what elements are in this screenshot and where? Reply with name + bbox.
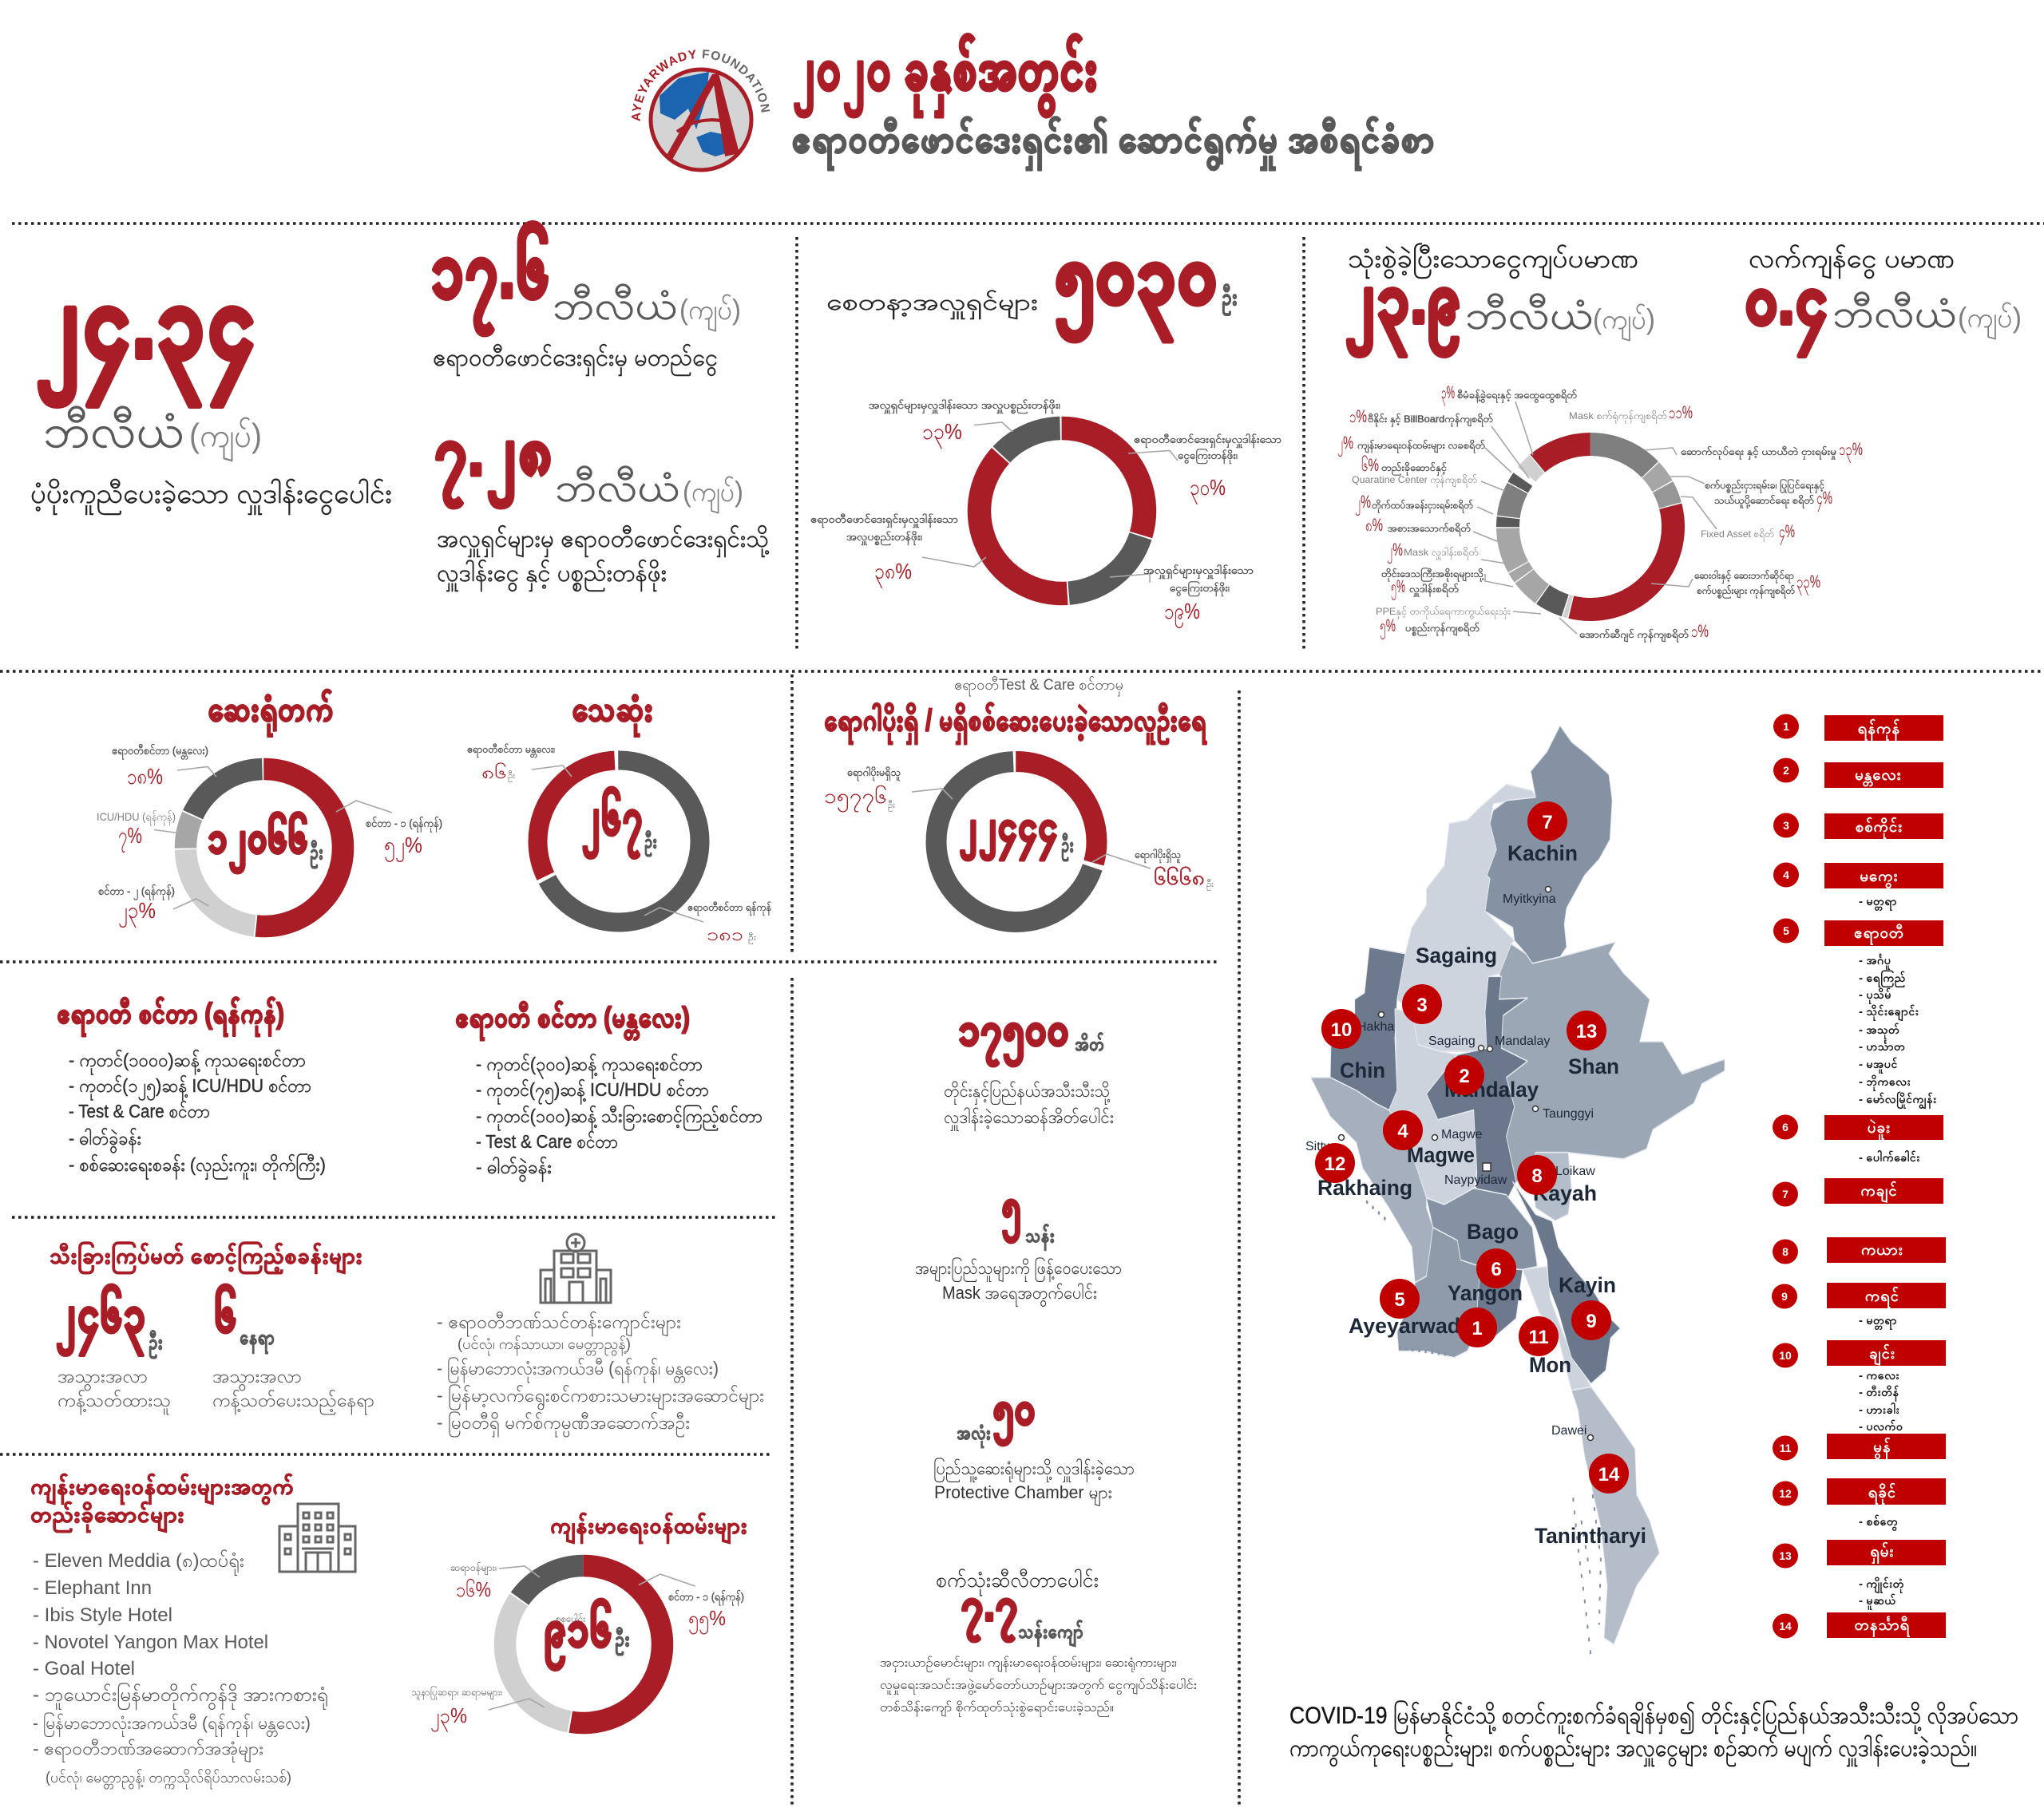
- donut chart: deaths: ဦး: [644, 830, 657, 857]
- heading: generous donors: စေတနာ့အလှူရှင်များ: [826, 288, 1038, 320]
- donut chart: admissions: စင်တာ - ၂ (ရန်ကုန်): [98, 884, 175, 900]
- legend: regions and townships: မန္တလေး: [1855, 766, 1901, 787]
- donut chart: expenditure breakdown: တည်းခိုဆောင်နှင့်: [1381, 461, 1447, 476]
- heading: health workers: ကျန်းမာရေးဝန်ထမ်းများ: [550, 1513, 747, 1545]
- title: ၂၀၂၀ ခုနှစ်အတွင်း: [791, 34, 1098, 117]
- list: quarantine sites: - မြန်မာဘောလုံးအကယ်ဒမီ (ရန်ကုန်၊ မန္တလေး): [437, 1358, 719, 1383]
- donut chart: deaths: ၁၈၁: [707, 924, 743, 944]
- donut chart: test results: ရောဂါပိုးရှိသူ: [1135, 849, 1181, 863]
- donut chart: test results: ၁၅၇၇၆: [824, 783, 887, 813]
- donut chart: expenditure breakdown: ပစ္စည်းကုန်ကျစရိတ်: [1405, 622, 1480, 636]
- legend: regions and townships: - တီးတိန်: [1859, 1385, 1899, 1402]
- legend: regions and townships: - မော်လမြိုင်ကျွန်း: [1859, 1090, 1937, 1110]
- legend: regions and townships: ချင်း: [1868, 1345, 1895, 1366]
- map: Myanmar regions: Hakha: [1357, 1020, 1394, 1034]
- donut chart: donation sources: ဧရာဝတီဖောင်ဒေးရှင်းမှလှူဒါန်းသော: [1134, 433, 1281, 448]
- map number badges: 11: [1528, 1327, 1549, 1348]
- heading: amount spent: သုံးစွဲခဲ့ပြီးသောငွေကျပ်ပမာဏ: [1348, 244, 1638, 279]
- unit: billion kyat: ဘီလီယံ: [1832, 291, 1956, 336]
- donut chart: admissions: ၁၈%: [127, 764, 163, 789]
- donut chart: expenditure breakdown: စက်ပစ္စည်းငှားရမ်းခ၊ ပြုပြင်ရေးနှင့်: [1705, 478, 1824, 493]
- legend: regions and townships: 6: [1782, 1121, 1788, 1133]
- map: Myanmar regions: Yangon: [1448, 1281, 1523, 1305]
- map: Myanmar regions: [1305, 726, 1725, 1657]
- donut chart: expenditure breakdown: Quaratine Center ကုန်ကျစရိတ်: [1352, 473, 1477, 488]
- legend: regions and townships: - အင်္ဂပူ: [1859, 953, 1891, 970]
- legend: regions and townships: - ဟင်္သာတ: [1859, 1039, 1905, 1054]
- stat: fuel litres: ၇.၇: [961, 1579, 1018, 1641]
- map: Myanmar regions: Mandalay: [1444, 1078, 1539, 1102]
- legend: regions and townships: စစ်ကိုင်း: [1855, 818, 1903, 839]
- icon: hospital: [541, 1234, 611, 1303]
- legend: regions and townships: 5: [1783, 924, 1789, 937]
- legend: regions and townships: 4: [1783, 868, 1789, 881]
- stat: fuel litres: [880, 1568, 1197, 1717]
- map: Myanmar regions: Ayeyarwady: [1349, 1314, 1472, 1338]
- header: logo and title: [632, 33, 1435, 172]
- donut chart: expenditure breakdown: တိုက်ထပ်အခန်းငှားရမ်းစရိတ်: [1372, 499, 1473, 513]
- stat: rice bags: [944, 1003, 1114, 1131]
- legend: regions and townships: - ပုသိမ်: [1859, 987, 1891, 1004]
- panel: Ayeyarwady centre Yangon: [57, 997, 326, 1180]
- stat: quarantine sites: ကန့်သတ်ပေးသည့်နေရာ: [212, 1390, 374, 1414]
- map: Myanmar regions: Kayah: [1533, 1181, 1597, 1205]
- map: Myanmar regions: Dawei: [1551, 1424, 1586, 1438]
- list: facilities: - Test & Care စင်တာ: [69, 1101, 210, 1122]
- heading: ဧရာဝတီ စင်တာ (မန္တလေး): [455, 1001, 690, 1040]
- legend: regions and townships: 7: [1782, 1188, 1788, 1201]
- donut chart: test results: [824, 762, 1214, 922]
- legend: regions and townships: မွန်: [1873, 1438, 1891, 1459]
- list: accommodation sites: - Eleven Meddia (၈)ထပ်ရုံး: [33, 1549, 244, 1576]
- caption: foundation contribution: ဧရာဝတီဖောင်ဒေးရှင်းမှ မတည်ငွေ: [433, 344, 718, 377]
- panel: total donations: (ကျပ်): [679, 293, 741, 332]
- stat: fuel litres: စက်သုံးဆီလီတာပေါင်း: [936, 1568, 1099, 1596]
- legend: regions and townships: - မအူပင်: [1859, 1057, 1898, 1074]
- donut chart: test results: ဦး: [1061, 833, 1074, 861]
- list: facilities: - ဓါတ်ခွဲခန်း: [69, 1128, 141, 1153]
- stat: quarantined people: ၂၄၆၃: [54, 1284, 146, 1355]
- donut chart: test results: ၆၆၆၈: [1154, 864, 1205, 889]
- donut chart: expenditure breakdown: ၃%: [1441, 382, 1455, 406]
- legend: regions and townships: 8: [1782, 1245, 1788, 1258]
- legend: regions and townships: 13: [1779, 1549, 1792, 1562]
- list: facilities: - ကုတင်(၃၀၀)ဆန့် ကုသရေးစင်တာ: [476, 1054, 703, 1078]
- caption: total donations: ပံ့ပိုးကူညီပေးခဲ့သော လှူဒါန်းငွေပေါင်း: [30, 479, 392, 515]
- donut chart: donation sources: ငွေကြေးတန်ဖိုး၊: [1170, 581, 1230, 596]
- stat: foundation contribution: ၁၇.၆: [430, 222, 550, 335]
- panel: donated supplies: [880, 1003, 1197, 1717]
- donut chart: expenditure breakdown: ၁၁%: [1669, 402, 1693, 422]
- donut chart: deaths: ဦး: [508, 770, 515, 782]
- stat: balance 0.4: ၀.၄: [1745, 259, 1828, 356]
- donut chart: donation sources: [810, 399, 1281, 629]
- list: quarantine sites: (ပင်လုံ၊ ကန်သာယာ၊ မေတ္တာညွန့်): [458, 1335, 631, 1356]
- legend: regions and townships: 10: [1779, 1349, 1792, 1362]
- list: accommodation sites: - ဘူယောင်းမြန်မာတိုက်ကွန်ဒို အားကစားရုံ: [33, 1682, 328, 1711]
- panel: Ayeyarwady centre Mandalay: [455, 1001, 763, 1182]
- donut chart: deaths: ဦး: [748, 932, 756, 944]
- legend: regions and townships: - သိုင်းချောင်း: [1859, 1004, 1919, 1021]
- map: Myanmar regions: Kayin: [1559, 1273, 1616, 1297]
- donut chart: donation sources: ငွေကြေးတန်ဖိုး၊: [1178, 449, 1238, 464]
- heading: deaths: သေဆုံး: [572, 690, 653, 737]
- legend: regions and townships: - ကလေး: [1859, 1369, 1899, 1383]
- map: Myanmar regions: Sagaing: [1416, 944, 1497, 967]
- list: accommodation sites: - ဧရာဝတီဘဏ်အဆောက်အအုံများ: [33, 1739, 263, 1763]
- stat: quarantined people: အသွားအလာ: [57, 1366, 148, 1391]
- stat: donor contribution: ၇.၂၈: [434, 411, 553, 508]
- donut chart: deaths: ၂၆၇: [580, 786, 643, 858]
- map: Myanmar regions: Sittwe: [1305, 1140, 1341, 1153]
- map number badges: 6: [1491, 1259, 1502, 1280]
- map: Myanmar regions: Naypyidaw: [1444, 1173, 1507, 1187]
- donut chart: health workers: ဦး: [615, 1627, 630, 1656]
- stat: rice bags: လှူဒါန်းခဲ့သောဆန်အိတ်ပေါင်း: [944, 1107, 1114, 1131]
- map number badges: 10: [1331, 1019, 1352, 1041]
- list: facilities: - ကုတင်(၁၀၀)ဆန့် သီးခြားစောင့်ကြည့်စင်တာ: [476, 1106, 763, 1130]
- list: facilities: - ဓါတ်ခွဲခန်း: [476, 1157, 552, 1182]
- donut chart: expenditure breakdown: ၅%: [1380, 615, 1396, 639]
- heading: remaining balance: လက်ကျန်ငွေ ပမာဏ: [1749, 244, 1955, 279]
- map number badges: 2: [1459, 1066, 1470, 1087]
- map number badges: [1315, 801, 1629, 1493]
- map: Myanmar regions: Chin: [1340, 1058, 1385, 1082]
- donut chart: expenditure breakdown: ၃၃%: [1796, 572, 1820, 595]
- list: facilities: - ကုတင်(၁၀၀၀)ဆန့် ကုသရေးစင်တာ: [69, 1050, 306, 1074]
- stat: quarantined people: ဦး: [149, 1330, 163, 1359]
- unit: billion kyat: ဘီလီယံ: [43, 406, 184, 457]
- legend: regions and townships: - မတ္တရာ: [1859, 1314, 1897, 1330]
- map: Myanmar regions: Mon: [1529, 1353, 1571, 1377]
- donut chart: expenditure breakdown: စက်ပစ္စည်းများ ကုန်ကျစရိတ်: [1697, 584, 1795, 599]
- donut chart: expenditure breakdown: ဗီနိုင်း နှင့် BillBoardကုန်ကျစရိတ်: [1368, 413, 1493, 427]
- map: Myanmar regions: Tanintharyi: [1535, 1524, 1646, 1548]
- list: accommodation sites: [33, 1549, 328, 1790]
- list: facilities: - စစ်ဆေးရေးစခန်း (လှည်းကူး၊ တိုက်ကြီး): [69, 1154, 326, 1180]
- list: quarantine sites: [437, 1311, 764, 1438]
- list: accommodation sites: - မြန်မာဘောလုံးအကယ်ဒမီ (ရန်ကုန်၊ မန္တလေး): [33, 1712, 311, 1737]
- stat: protective chambers: ၅၀: [992, 1383, 1036, 1445]
- icon: Ayeyarwady Foundation logo: AYEYARWADY FOUNDATION: [632, 49, 770, 121]
- donut chart: admissions: ၂၃%: [118, 898, 156, 928]
- stat: quarantined people: [54, 1284, 171, 1414]
- unit: billion kyat: ဘီလီယံ: [1465, 292, 1593, 338]
- donut chart: donation sources: ၁၃%: [922, 419, 962, 449]
- donut chart: expenditure breakdown: စီမံခန့်ခွဲရေးနှင့် အထွေထွေစရိတ်: [1457, 389, 1577, 403]
- panel: tests: [824, 675, 1214, 922]
- legend: regions and townships: - ပလက်ဝ: [1859, 1419, 1903, 1434]
- map: Myanmar regions: Myitkyina: [1503, 892, 1556, 906]
- list: accommodation sites: (ပင်လုံ၊ မေတ္တာညွန့်၊ တက္ကသိုလ်ရိပ်သာလမ်းသစ်): [46, 1768, 291, 1790]
- list: facilities: - ကုတင်(၇၅)ဆန့် ICU/HDU စင်တာ: [476, 1079, 709, 1104]
- legend: regions and townships: ကချင်: [1860, 1182, 1897, 1203]
- subheading: Test and Care centre: ဧရာဝတီTest & Care စင်တာမှ: [954, 675, 1123, 697]
- donut chart: expenditure breakdown: ၁၃%: [1839, 439, 1863, 463]
- legend: regions and townships: ဧရာဝတီ: [1853, 924, 1904, 945]
- list: accommodation sites: - Novotel Yangon Max Hotel: [33, 1632, 268, 1653]
- donut chart: expenditure breakdown: [1337, 382, 1863, 643]
- heading: admitted: ဆေးရုံတက်: [208, 689, 334, 737]
- stat: 5030 donors: ၅၀၃၀: [1054, 227, 1218, 341]
- donut chart: expenditure breakdown: ၁%: [1349, 406, 1367, 426]
- donut chart: admissions: [97, 744, 442, 928]
- donut chart: expenditure breakdown: Fixed Asset စရိတ်: [1701, 528, 1774, 542]
- panel: quarantine centres: [50, 1234, 764, 1438]
- heading: ကျန်းမာရေးဝန်ထမ်းများအတွက်: [30, 1474, 294, 1505]
- list: quarantine sites: - မြဝတီရှိ မက်စ်ကုမ္ပဏီအဆောက်အဦး: [437, 1412, 690, 1438]
- stat: masks: Mask အရေအတွက်ပေါင်း: [942, 1283, 1097, 1308]
- caption: donor contribution: [437, 525, 770, 592]
- legend: regions and townships: - ရေကြည်: [1859, 969, 1906, 987]
- donut chart: admissions: ၇%: [118, 823, 142, 853]
- donut chart: health workers: [411, 1561, 744, 1732]
- panel: total donations: (ကျပ်): [189, 417, 262, 462]
- legend: regions and townships: - စစ်တွေ: [1859, 1514, 1898, 1532]
- caption: donor contribution: လှူဒါန်းငွေ နှင့် ပစ္စည်းတန်ဖိုး: [437, 559, 667, 592]
- map number badges: 12: [1325, 1153, 1345, 1175]
- map: Myanmar regions: Taunggyi: [1543, 1107, 1594, 1121]
- heading: tested population: ရောဂါပိုးရှိ / မရှိစစ်ဆေးပေးခဲ့သောလူဦးရေ: [824, 702, 1207, 744]
- stat: rice bags: အိတ်: [1075, 1033, 1104, 1055]
- panel: donors: [810, 227, 1281, 629]
- panel: hospital admissions: [97, 689, 442, 928]
- legend: regions and townships: 1: [1783, 720, 1789, 733]
- panel: health worker accommodation: [30, 1474, 747, 1790]
- donut chart: expenditure breakdown: ၄%: [1779, 521, 1795, 545]
- icon: Ayeyarwady Foundation logo: [632, 49, 770, 172]
- list: facilities: - Test & Care စင်တာ: [476, 1131, 618, 1152]
- donut chart: expenditure breakdown: ကျန်းမာရေးဝန်ထမ်းများ လခစရိတ်: [1357, 439, 1485, 453]
- list: quarantine sites: - ဧရာဝတီဘဏ်သင်တန်းကျောင်းများ: [437, 1311, 681, 1336]
- map: Myanmar regions: Mandalay: [1495, 1035, 1550, 1048]
- stat: protective chambers: ပြည်သူ့ဆေးရုံများသို့ လှူဒါန်းခဲ့သော: [933, 1458, 1135, 1482]
- heading: [30, 1474, 294, 1533]
- stat: masks: ၅: [1001, 1180, 1021, 1242]
- list: facilities: - ကုတင်(၁၂၅)ဆန့် ICU/HDU စင်တာ: [69, 1075, 311, 1100]
- stat: fuel litres: လူမှုရေးအသင်းအဖွဲ့မော်တော်ယာဉ်များအတွက် ငွေကျပ်သိန်းပေါင်း: [880, 1678, 1197, 1695]
- list: accommodation sites: - Elephant Inn: [33, 1577, 152, 1599]
- stat: quarantine sites: အသွားအလာ: [212, 1366, 302, 1391]
- stat: quarantine sites: နေရာ: [240, 1325, 275, 1354]
- donut chart: expenditure breakdown: ၆%: [1361, 455, 1379, 475]
- map number badges: 13: [1576, 1021, 1597, 1042]
- map number badges: 8: [1531, 1165, 1543, 1187]
- legend: regions and townships: မကွေး: [1860, 868, 1898, 888]
- unit: persons: ဦး: [1222, 283, 1238, 316]
- stat: spent 23.9: ၂၃.၉: [1343, 257, 1461, 356]
- panel: expenditure and balance: (ကျပ်): [1593, 303, 1655, 342]
- donut chart: health workers: ၁၆%: [456, 1577, 491, 1601]
- stat: protective chambers: Protective Chamber များ: [934, 1482, 1112, 1506]
- donut chart: expenditure breakdown: အစားအသောက်စရိတ်: [1388, 522, 1471, 536]
- donut chart: expenditure breakdown: ၄%: [1816, 488, 1832, 512]
- donut chart: admissions: ဦး: [310, 840, 323, 868]
- donut chart: expenditure breakdown: တိုင်းဒေသကြီးအစိုးရများသို့: [1381, 567, 1484, 582]
- map number badges: 4: [1397, 1121, 1408, 1142]
- donut chart: health workers: ၉၁၆: [544, 1598, 612, 1670]
- map: Myanmar regions: Sagaing: [1428, 1035, 1476, 1048]
- unit: billion kyat: ဘီလီယံ: [555, 465, 679, 510]
- legend: regions and townships: 3: [1783, 819, 1789, 832]
- list: facilities: [69, 1050, 326, 1180]
- legend: regions and townships: - မူဆယ်: [1859, 1593, 1896, 1610]
- donut chart: health workers: စင်တာ - ၁ (ရန်ကုန်): [668, 1590, 744, 1605]
- legend: regions and townships: - ဟားခါး: [1859, 1402, 1899, 1417]
- stat: fuel litres: တစ်သိန်းကျော် စိုက်ထုတ်သုံးစွဲရောင်းပေးခဲ့သည်။: [880, 1700, 1114, 1717]
- donut chart: expenditure breakdown: ၈%: [1365, 515, 1383, 535]
- donut chart: admissions: ဧရာဝတီစင်တာ (မန္တလေး): [112, 744, 208, 759]
- donut chart: donation sources: ဧရာဝတီဖောင်ဒေးရှင်းမှလှူဒါန်းသော: [810, 513, 958, 528]
- heading: သီးခြားကြပ်မတ် စောင့်ကြည့်စခန်းများ: [50, 1242, 362, 1275]
- map: Myanmar regions: Bago: [1467, 1220, 1519, 1244]
- donut chart: admissions: စင်တာ - ၁ (ရန်ကုန်): [366, 817, 442, 832]
- donut chart: deaths: ဧရာဝတီစင်တာ မန္တလေး၊: [467, 743, 555, 758]
- panel: expenditure and balance: [1337, 244, 2022, 643]
- panel: total donations: [30, 222, 770, 592]
- legend: regions and townships: - မတ္တရာ: [1859, 895, 1897, 911]
- legend: regions and townships: တနင်္သာရီ: [1854, 1616, 1910, 1637]
- donut chart: test results: ဦး: [888, 800, 895, 812]
- legend: regions and townships: 9: [1781, 1290, 1788, 1303]
- unit: billion kyat: ဘီလီယံ: [553, 283, 677, 328]
- donut chart: admissions: ICU/HDU (ရန်ကုန်): [97, 810, 176, 825]
- stat: masks: အများပြည်သူများကို ဖြန့်ဝေပေးသော: [915, 1257, 1122, 1282]
- map: Myanmar regions: Rakhaing: [1317, 1176, 1412, 1200]
- stat: rice bags: ၁၇၅၀၀: [958, 1003, 1069, 1066]
- stat: fuel litres: သန်းကျော်: [1018, 1620, 1083, 1647]
- legend: regions and townships: ကယား: [1861, 1241, 1903, 1259]
- map: Myanmar regions: Kachin: [1507, 841, 1578, 865]
- donut chart: donation sources: ၃၀%: [1190, 475, 1226, 505]
- icon: hotel building: [279, 1504, 355, 1572]
- donut chart: deaths: ဧရာဝတီစင်တာ ရန်ကုန်: [687, 901, 771, 916]
- donut chart: donation sources: အလှူရှင်များမှလှူဒါန်းသော အလှူပစ္စည်းတန်ဖိုး၊: [869, 399, 1060, 413]
- map number badges: 3: [1416, 995, 1428, 1016]
- donut chart: expenditure breakdown: လှူဒါန်းစရိတ်: [1409, 583, 1459, 597]
- legend: regions and townships: - ပေါက်ခေါင်း: [1859, 1150, 1920, 1165]
- list: facilities: [476, 1054, 763, 1182]
- stat: total donations amount: ၂၄.၃၄: [33, 261, 256, 406]
- stat: masks: သန်း: [1025, 1224, 1055, 1251]
- legend: regions and townships: - ကျိုင်းတုံ: [1859, 1577, 1904, 1593]
- legend: regions and townships: 11: [1780, 1442, 1792, 1454]
- map: Myanmar regions: Loikaw: [1555, 1165, 1595, 1178]
- legend: regions and townships: [1772, 714, 1946, 1638]
- map: Myanmar regions: Shan: [1568, 1054, 1619, 1078]
- donut chart: health workers: သူနာပြုဆရာ၊ ဆရာမများ၊: [411, 1685, 502, 1700]
- legend: regions and townships: ပဲခူး: [1867, 1119, 1891, 1140]
- stat: protective chambers: အလုံး: [957, 1422, 991, 1448]
- donut chart: expenditure breakdown: ဆေးဝါးနှင့် ဆေးဘက်ဆိုင်ရာ: [1694, 569, 1794, 584]
- donut chart: test results: ဦး: [1206, 879, 1214, 891]
- donut chart: expenditure breakdown: ၂%: [1387, 540, 1403, 564]
- donut chart: donation sources: အလှူရှင်များမှလှူဒါန်းသော: [1143, 564, 1254, 579]
- donut chart: expenditure breakdown: ၂%: [1337, 433, 1353, 457]
- map: Myanmar regions: Magwe: [1407, 1143, 1475, 1167]
- map: Myanmar regions: Magwe: [1441, 1128, 1483, 1141]
- map number badges: 7: [1542, 812, 1553, 833]
- donut chart: health workers: ဆရာဝန်များ၊: [450, 1561, 497, 1576]
- donut chart: admissions: ၁၂၀၆၆: [208, 812, 308, 873]
- map number badges: 1: [1472, 1318, 1483, 1339]
- map number badges: 14: [1598, 1464, 1620, 1486]
- donut chart: expenditure breakdown: Mask စက်ရုံကုန်ကျစရိတ်: [1569, 409, 1667, 424]
- stat: protective chambers: [933, 1383, 1135, 1506]
- list: quarantine sites: - မြန်မာ့လက်ရွေးစင်ကစားသမားများအဆောင်များ: [437, 1385, 764, 1410]
- subtitle: ဧရာဝတီဖောင်ဒေးရှင်း၏ ဆောင်ရွက်မှု အစီရင်ခံစာ: [791, 115, 1435, 171]
- donut chart: expenditure breakdown: ဆောက်လုပ်ရေး နှင့် ယာယီတဲ ငှားရမ်းမှု: [1681, 445, 1836, 460]
- legend: regions and townships: - အသုတ်: [1859, 1023, 1899, 1039]
- legend: regions and townships: 14: [1779, 1620, 1792, 1632]
- donut chart: expenditure breakdown: ၁%: [1691, 621, 1709, 641]
- donut chart: donation sources: ၃၈%: [874, 559, 912, 589]
- heading: တည်းခိုဆောင်များ: [30, 1501, 184, 1533]
- stat: masks: [915, 1180, 1122, 1308]
- panel: deaths: [467, 690, 771, 944]
- map number badges: 5: [1394, 1289, 1405, 1311]
- legend: regions and townships: 12: [1779, 1487, 1792, 1500]
- stat: quarantined people: ကန့်သတ်ထားသူ: [57, 1390, 171, 1414]
- panel: expenditure and balance: (ကျပ်): [1958, 301, 2022, 340]
- map number badges: 9: [1586, 1311, 1597, 1332]
- donut chart: health workers: ၂၃%: [430, 1703, 467, 1732]
- caption: donor contribution: အလှူရှင်များမှ ဧရာဝတီဖောင်ဒေးရှင်းသို့: [437, 525, 770, 558]
- donut chart: expenditure breakdown: Mask လှူဒါန်းစရိတ်: [1404, 546, 1479, 560]
- legend: regions and townships: - ဘိုကလေး: [1859, 1074, 1911, 1091]
- text block: COVID-19 summary: [1289, 1700, 2018, 1767]
- donut chart: test results: ၂၂၄၄၄: [958, 802, 1058, 860]
- legend: regions and townships: ရခိုင်: [1868, 1484, 1896, 1505]
- donut chart: expenditure breakdown: အောက်ဆီဂျင် ကုန်ကျစရိတ်: [1579, 628, 1689, 643]
- donut chart: expenditure breakdown: သယ်ယူပို့ဆောင်ရေး စရိတ်: [1714, 494, 1814, 508]
- legend: regions and townships: 2: [1783, 764, 1789, 777]
- list: accommodation sites: - Goal Hotel: [33, 1658, 135, 1679]
- stat: quarantine sites: ၆: [214, 1284, 237, 1343]
- stat: quarantine sites: [212, 1284, 374, 1414]
- list: accommodation sites: - Ibis Style Hotel: [33, 1604, 172, 1626]
- panel: total donations: (ကျပ်): [683, 475, 743, 514]
- donut chart: donation sources: အလှူပစ္စည်းတန်ဖိုး၊: [846, 531, 922, 545]
- stat: rice bags: တိုင်းနှင့်ပြည်နယ်အသီးသီးသို့: [944, 1080, 1111, 1106]
- legend: regions and townships: ရှမ်း: [1870, 1543, 1894, 1564]
- legend: regions and townships: ရန်ကုန်: [1857, 720, 1900, 741]
- donut chart: expenditure breakdown: ၂%: [1355, 492, 1371, 516]
- donut chart: health workers: စုစုပေါင်း: [556, 1612, 585, 1627]
- donut chart: expenditure breakdown: ၅%: [1391, 576, 1405, 600]
- legend: regions and townships: ကရင်: [1865, 1288, 1899, 1308]
- donut chart: test results: ရောဂါပိုးမရှိသူ: [847, 766, 901, 781]
- donut chart: donation sources: ၁၉%: [1164, 599, 1200, 629]
- stat: fuel litres: အငှားယာဉ်မောင်းများ၊ ကျန်းမာရေးဝန်ထမ်းများ၊ ဆေးရုံကားများ၊: [880, 1656, 1177, 1672]
- donut chart: expenditure breakdown: PPEနှင့် တကိုယ်ရေကာကွယ်ရေးသုံး: [1376, 605, 1511, 619]
- donut chart: admissions: ၅၂%: [384, 833, 422, 863]
- donut chart: deaths: ၈၆: [481, 762, 507, 782]
- heading: ဧရာဝတီ စင်တာ (ရန်ကုန်): [57, 997, 284, 1036]
- donut chart: deaths: [467, 743, 771, 944]
- donut chart: health workers: ၅၅%: [688, 1606, 726, 1635]
